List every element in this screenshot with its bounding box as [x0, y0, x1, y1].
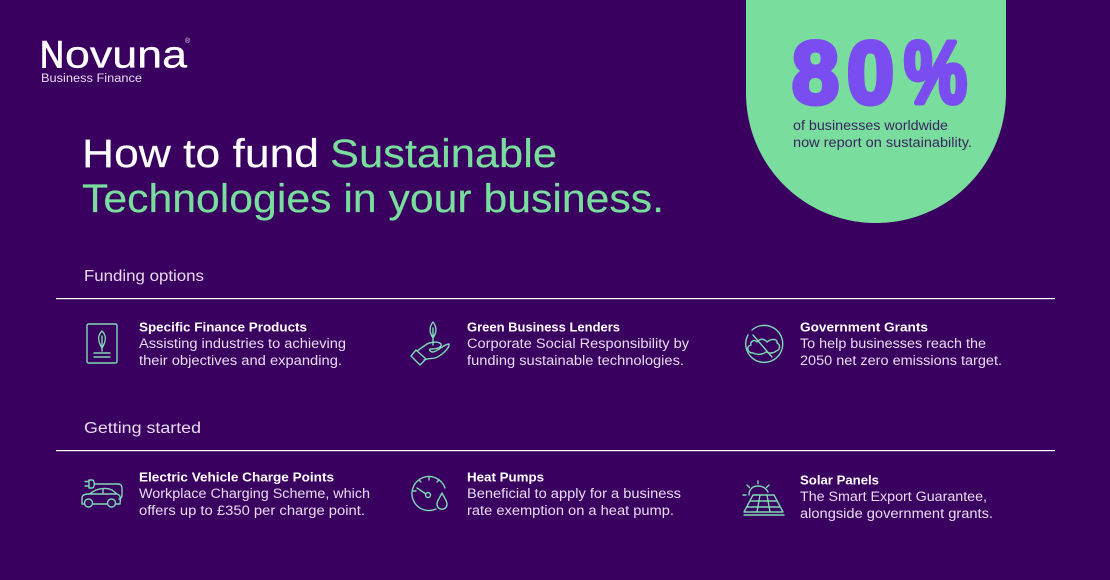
title [82, 132, 664, 221]
text: Beneficial to apply for a business [467, 486, 681, 501]
text: To help businesses reach the [800, 336, 986, 351]
title: Sustainable [330, 132, 557, 176]
big number: 8 [792, 23, 839, 122]
text [139, 470, 370, 518]
icon: electric car with plug [82, 480, 122, 507]
text [467, 470, 681, 518]
title: How to fund [82, 132, 319, 176]
callout text: of businesses worldwide [793, 118, 948, 133]
logo: Novuna Business Finance: ® [185, 37, 191, 45]
text: alongside government grants. [800, 506, 993, 521]
big number: % [904, 23, 967, 122]
text: Electric Vehicle Charge Points [139, 470, 334, 484]
title: Technologies in your business. [82, 177, 664, 221]
item: Government Grants [746, 320, 1002, 368]
text [800, 320, 1002, 368]
text [800, 472, 993, 521]
callout background shape [746, 0, 1006, 223]
callout: 80 percent statistic: now report on sustainability. [793, 135, 972, 150]
section heading: Funding options: Funding options [84, 268, 204, 285]
item: Solar Panels [743, 472, 993, 521]
item: Electric Vehicle Charge Points [82, 470, 370, 518]
item: Green Business Lenders [411, 320, 689, 368]
text: Corporate Social Responsibility by [467, 336, 689, 351]
text: Specific Finance Products [139, 320, 307, 334]
text: Heat Pumps [467, 470, 544, 484]
section heading: Getting started: Getting started [84, 420, 201, 437]
logo: Novuna Business Finance: Business Finance [41, 73, 142, 85]
text: funding sustainable technologies. [467, 353, 684, 368]
text: Green Business Lenders [467, 320, 620, 334]
icon: document with leaf [87, 324, 117, 363]
text: 2050 net zero emissions target. [800, 353, 1002, 368]
logo: Novuna Business Finance: N [40, 34, 64, 76]
text: their objectives and expanding. [139, 353, 342, 368]
text: The Smart Export Guarantee, [800, 489, 987, 504]
logo: Novuna Business Finance: ovuna [65, 34, 188, 76]
text: rate exemption on a heat pump. [467, 503, 674, 518]
text: Government Grants [800, 320, 928, 334]
item: Specific Finance Products [87, 320, 346, 368]
text: offers up to £350 per charge point. [139, 503, 365, 518]
text: Assisting industries to achieving [139, 336, 346, 351]
text: Workplace Charging Scheme, which [139, 486, 370, 501]
icon: crossed-out cloud [746, 325, 783, 362]
text [467, 320, 689, 368]
icon: gauge with water drop [412, 477, 447, 511]
text: Solar Panels [800, 472, 879, 488]
item: Heat Pumps [412, 470, 681, 518]
icon: hand holding leaf [411, 322, 449, 365]
icon: solar panel with sun [743, 481, 784, 515]
callout: 80 percent statistic [746, 0, 1006, 223]
big number: 0 [847, 23, 894, 122]
logo: Novuna Business Finance [40, 34, 191, 85]
text [139, 320, 346, 368]
